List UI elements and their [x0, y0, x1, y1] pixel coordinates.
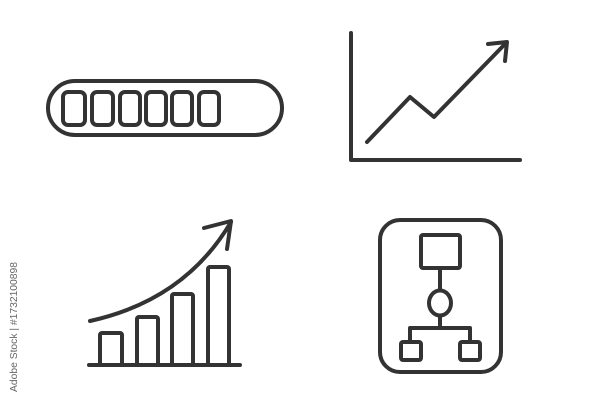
watermark text: Adobe Stock | #1732100898 — [9, 262, 20, 392]
icon: line chart with arrow — [351, 33, 520, 160]
icon: bar chart with rising arrow — [89, 221, 240, 365]
icon: org chart in rounded frame — [380, 220, 501, 372]
icon: progress bar — [48, 81, 282, 135]
